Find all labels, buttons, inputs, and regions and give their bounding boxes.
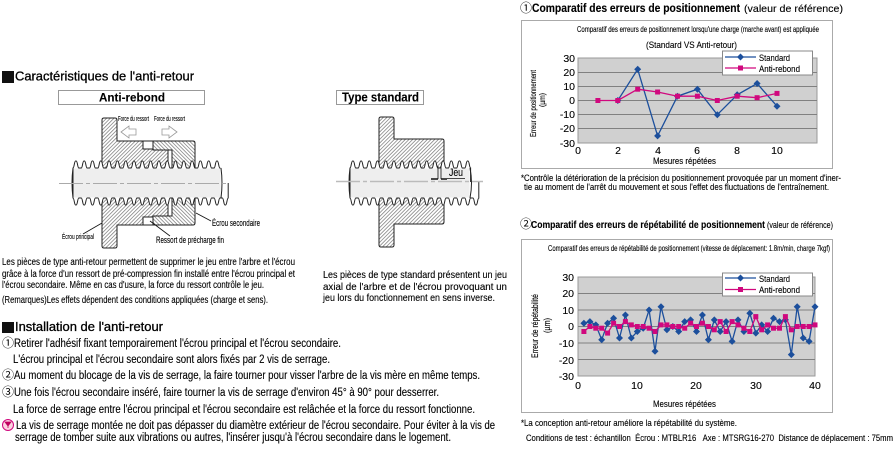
heading: repeatability comparison: Comparatif des erreurs de répétabilité de positionnement [531, 219, 765, 231]
y axis ticks: 20 [563, 67, 575, 79]
heading: positioning error comparison: (valeur de référence) [744, 3, 843, 15]
chart title [577, 24, 819, 51]
clearance marker [431, 166, 465, 179]
axis titles [529, 69, 716, 167]
text block: installation steps [2, 334, 480, 416]
label: ecrou principal: Écrou principal [62, 232, 94, 241]
text block: anti-rebond description: grâce à la force d'un ressort de pré-compression fin installé entre l'écrou principal et [2, 269, 295, 280]
axis titles: (µm) [538, 93, 547, 107]
x axis ticks: 20 [690, 380, 702, 392]
plot area [578, 277, 815, 376]
text block: standard description: jeu lors du fonctionnement en sens inverse. [322, 292, 495, 304]
y axis ticks: -10 [559, 338, 574, 350]
x axis ticks [575, 380, 821, 392]
text block: anti-rebond description: (Remarques)Les effets dépendent des conditions appliquées (charge et sens). [2, 295, 268, 306]
y axis ticks [560, 53, 575, 150]
heading: repeatability comparison: (valeur de référence) [767, 220, 833, 231]
y axis ticks [559, 272, 574, 383]
text block: installation steps: ① [2, 334, 14, 351]
legend: Anti-rebond [759, 64, 800, 75]
diagram: anti-rebond nut [59, 114, 229, 248]
axis titles [530, 294, 716, 410]
text block: installation steps: ③ [2, 383, 14, 400]
series: standard [584, 307, 815, 355]
text block: anti-rebond description [2, 257, 295, 306]
y axis ticks: 30 [563, 53, 575, 65]
y axis ticks: -20 [560, 123, 575, 135]
text block: warning note: La vis de serrage montée ne doit pas dépasser du diamètre extérieur de l'écrou secondaire. Pour éviter à la vis de [16, 420, 495, 432]
series: standard [618, 69, 777, 136]
heading: repeatability comparison [520, 215, 833, 232]
note: chart 2: *La conception anti-retour améliore la répétabilité du système. [521, 418, 737, 429]
x axis ticks [575, 145, 783, 157]
force labels: Force du ressort [118, 114, 150, 123]
text block: anti-rebond description: l'écrou secondaire. Même en cas d'usure, la force du ressort contrôle le jeu. [2, 280, 264, 291]
y axis ticks: 30 [562, 272, 574, 284]
y axis ticks: -20 [559, 355, 574, 367]
leader arrows [83, 213, 211, 236]
note: chart 1: tie au moment de l'arrêt du mouvement et sous l'effet des fluctuations de l'entraînement. [524, 182, 829, 193]
diagram: standard nut [336, 117, 483, 247]
center line [59, 182, 229, 184]
text block: installation steps: Retirer l'adhésif fixant temporairement l'écrou principal et l'écrou secondaire. [14, 338, 341, 350]
text block: warning note: serrage de tomber suite aux vibrations ou autres, l'insérer jusqu'à l'écrou secondaire dans le logement. [15, 432, 451, 444]
x axis ticks: 10 [771, 145, 783, 157]
label box: type standard: Type standard [342, 90, 419, 104]
x axis ticks: 8 [734, 145, 740, 157]
heading: installation: Installation de l'anti-retour [15, 320, 163, 334]
y axis ticks: 0 [568, 321, 574, 333]
legend: Standard [759, 274, 790, 285]
label: ressort: Ressort de précharge fin [156, 235, 224, 245]
heading: repeatability comparison: ② [520, 215, 532, 232]
text block: installation steps: Une fois l'écrou secondaire inséré, faire tourner la vis de serrage d'environ 45° à 90° pour desserrer. [14, 387, 439, 399]
legend: Anti-rebond [759, 285, 800, 296]
x axis ticks: 4 [655, 145, 661, 157]
note: chart 2 [521, 418, 893, 444]
jeu label: Jeu [449, 167, 463, 179]
legend [722, 273, 812, 296]
legend [722, 51, 812, 75]
heading: positioning error comparison: Comparatif des erreurs de positionnement [532, 3, 740, 15]
x axis ticks: 6 [694, 145, 700, 157]
x axis ticks: 10 [631, 380, 643, 392]
y axis ticks: 10 [563, 81, 575, 93]
note: chart 1 [521, 173, 841, 193]
text block: anti-rebond description: Les pièces de type anti-retour permettent de supprimer le jeu entre l'arbre et l'écrou [2, 257, 295, 268]
plot area [578, 58, 817, 143]
label box: anti-rebond: Anti-rebond [99, 90, 165, 104]
series: anti-rebond [584, 317, 815, 333]
y axis ticks: -30 [559, 371, 574, 383]
force labels: Force du ressort [154, 114, 186, 123]
chart title: (Standard VS Anti-retour) [646, 40, 737, 51]
legend: Standard [759, 53, 790, 64]
chart: positioning error [522, 20, 832, 168]
text block: warning note [15, 420, 495, 444]
chart: repeatability error [522, 240, 832, 412]
y axis ticks: 10 [562, 305, 574, 317]
axis titles: Erreur de positionnement [529, 69, 538, 137]
text block: installation steps: Au moment du blocage de la vis de serrage, la faire tourner pour visser l'arbre de la vis mère en même temps. [14, 370, 480, 382]
label box: anti-rebond [58, 90, 204, 104]
axis titles: Erreur de répétabilité [530, 294, 541, 358]
text block: installation steps: ② [2, 366, 14, 383]
y axis ticks: -10 [560, 109, 575, 121]
label: ecrou secondaire: Écrou secondaire [212, 218, 260, 228]
text block: standard description [322, 269, 507, 304]
x axis ticks: 0 [575, 380, 581, 392]
x axis ticks: 40 [809, 380, 821, 392]
screw shaft [72, 161, 228, 205]
x axis ticks: 30 [750, 380, 762, 392]
axis titles: (µm) [542, 318, 553, 333]
icon: warning [2, 420, 14, 430]
heading: characteristics: Caractéristiques de l'anti-retour [15, 68, 195, 84]
text block: standard description: axial de l'arbre et de l'écrou provoquant un [323, 281, 507, 293]
y axis ticks: 20 [562, 288, 574, 300]
axis titles: Mesures répétées [653, 399, 716, 410]
spring force arrows [121, 126, 177, 138]
text block: installation steps: La force de serrage entre l'écrou principal et l'écrou secondaire est relâchée et la force du ressort fonctionne. [13, 404, 475, 416]
nut halves [102, 118, 195, 248]
y axis ticks: -30 [560, 138, 575, 150]
x axis ticks: 2 [615, 145, 621, 157]
axis titles: Mesures répétées [653, 156, 716, 167]
series: anti-rebond [598, 89, 777, 100]
heading: positioning error comparison [520, 0, 843, 16]
y axis ticks: 0 [569, 95, 575, 107]
text block: installation steps: L'écrou principal et l'écrou secondaire sont alors fixés par 2 vis de serrage. [13, 354, 330, 366]
x axis ticks: 0 [575, 145, 581, 157]
text block: standard description: Les pièces de type standard présentent un jeu [323, 269, 507, 281]
